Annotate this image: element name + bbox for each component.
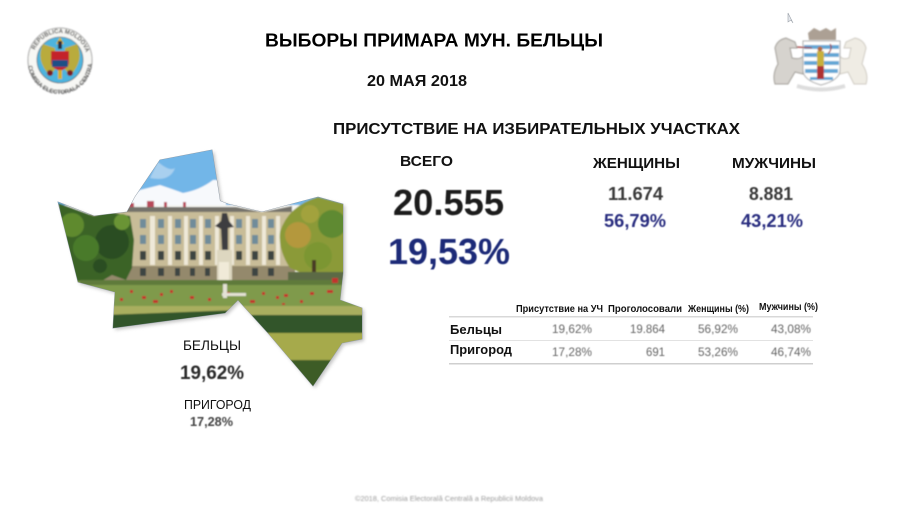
row: Balti: 56,92% <box>698 322 738 336</box>
row: suburbs: Пригород <box>450 342 513 357</box>
table header: Присутствие на УЧ <box>516 304 603 315</box>
total voters number: 20.555 <box>393 182 504 223</box>
row: suburbs: 17,28% <box>552 345 592 359</box>
table header: Проголосовали <box>608 304 682 315</box>
suburbs label: ПРИГОРОД <box>184 398 252 412</box>
table header <box>516 302 818 315</box>
row: Balti: 43,08% <box>771 322 811 336</box>
title: ВЫБОРЫ ПРИМАРА МУН. БЕЛЬЦЫ <box>265 30 603 50</box>
table header: Женщины (%) <box>687 304 749 315</box>
flower bed <box>60 281 370 308</box>
section heading: ПРИСУТСТВИЕ НА ИЗБИРАТЕЛЬНЫХ УЧАСТКАХ <box>333 121 740 138</box>
map shadow <box>60 152 364 388</box>
map photo <box>50 145 370 390</box>
row: Balti: 19.864 <box>630 322 665 336</box>
row: Balti: Бельцы <box>450 322 502 337</box>
row: suburbs: 691 <box>646 345 665 359</box>
row: Balti: 19,62% <box>552 322 592 336</box>
hedges and lawn <box>60 306 370 315</box>
footer copyright: ©2018, Comisia Electorală Centrală a Republicii Moldova <box>355 494 544 503</box>
men percent: 43,21% <box>741 211 803 231</box>
Balti turnout value: 19,62% <box>180 363 244 384</box>
left trees <box>58 203 134 282</box>
monument <box>217 250 232 283</box>
men count: 8.881 <box>749 184 793 204</box>
row: Balti <box>450 322 811 337</box>
women heading: ЖЕНЩИНЫ <box>592 155 680 172</box>
total turnout percent: 19,53% <box>388 231 510 272</box>
right tree <box>280 197 345 280</box>
table header: Мужчины (%) <box>759 302 818 313</box>
row: suburbs: 53,26% <box>698 345 738 359</box>
men heading: МУЖЧИНЫ <box>732 155 816 172</box>
logo: election commission seal <box>26 26 94 95</box>
date: 20 МАЯ 2018 <box>367 73 467 90</box>
map with photo of city hall <box>50 145 370 390</box>
windows <box>140 219 274 244</box>
women count: 11.674 <box>608 184 663 204</box>
white base of map <box>58 150 362 386</box>
logo: election commission seal: REPUBLICA MOLDOVA <box>30 28 90 53</box>
row: suburbs <box>450 342 811 359</box>
total label: ВСЕГО <box>400 153 453 170</box>
results table <box>449 302 818 364</box>
logo: Balti coat of arms <box>774 28 867 90</box>
suburbs turnout value: 17,28% <box>190 414 233 429</box>
columns <box>150 216 280 265</box>
Balti label: БЕЛЬЦЫ <box>183 338 241 353</box>
row: suburbs: 46,74% <box>771 345 811 359</box>
women percent: 56,79% <box>604 211 666 231</box>
cursor icon <box>788 13 793 23</box>
